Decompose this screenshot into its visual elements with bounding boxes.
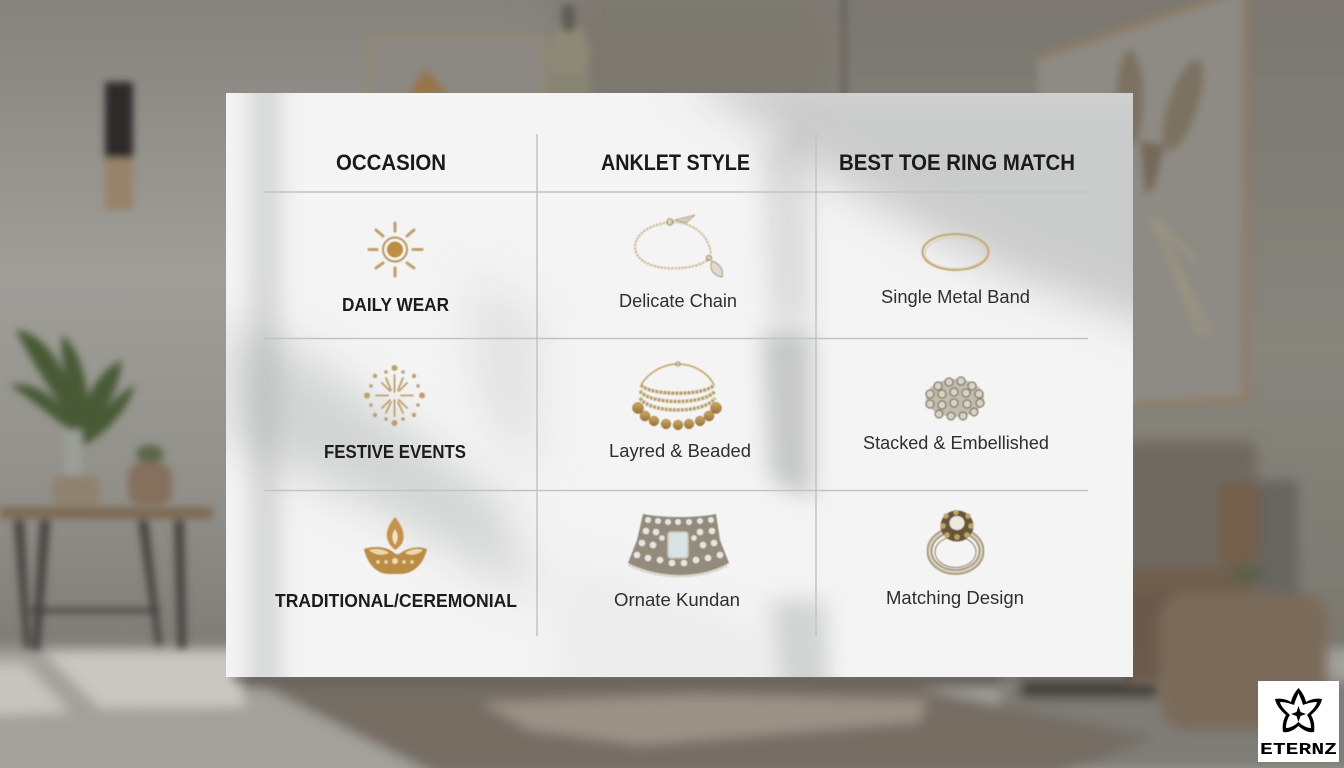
panel shadow — [232, 674, 1132, 682]
label: matching design: Matching Design — [886, 588, 1024, 608]
icon: stacked embellished ring — [926, 377, 984, 420]
label: daily wear: DAILY WEAR — [342, 295, 449, 315]
logo: eternz — [1258, 681, 1339, 762]
framed picture top — [368, 5, 590, 126]
label: stacked and embellished: Stacked & Embellished — [863, 433, 1049, 453]
icon: delicate chain anklet — [635, 215, 723, 277]
brand name: ETERNZ — [1260, 741, 1337, 760]
sofa and basket — [1125, 441, 1327, 730]
label: single metal band: Single Metal Band — [881, 287, 1030, 307]
table grid lines — [264, 134, 1088, 636]
label: layred and beaded: Layred & Beaded — [609, 441, 751, 461]
icon: sun — [369, 223, 422, 276]
icon: ornate kundan anklet — [628, 514, 729, 576]
icon: single metal band ring — [922, 234, 988, 270]
potted plant left — [10, 330, 172, 508]
side table — [0, 507, 212, 650]
label: festive events: FESTIVE EVENTS — [324, 442, 466, 462]
floor — [0, 648, 1344, 768]
column heading: best toe ring match: BEST TOE RING MATCH — [839, 150, 1075, 175]
framed picture right — [1038, 0, 1245, 404]
label: delicate chain: Delicate Chain — [619, 291, 737, 311]
white panel — [226, 93, 1133, 677]
icon: star flower — [1275, 688, 1322, 732]
column heading: occasion: OCCASION — [336, 150, 446, 175]
icon: matching design ring — [930, 510, 982, 572]
wall lamp — [105, 82, 133, 210]
label: traditional ceremonial: TRADITIONAL/CEREMONIAL — [275, 591, 517, 611]
icon: diya lamp — [364, 517, 427, 574]
icon: layered beaded anklet — [632, 362, 722, 430]
icon: firework burst — [364, 365, 425, 426]
column heading: anklet style: ANKLET STYLE — [601, 150, 750, 175]
label: ornate kundan: Ornate Kundan — [614, 590, 740, 610]
